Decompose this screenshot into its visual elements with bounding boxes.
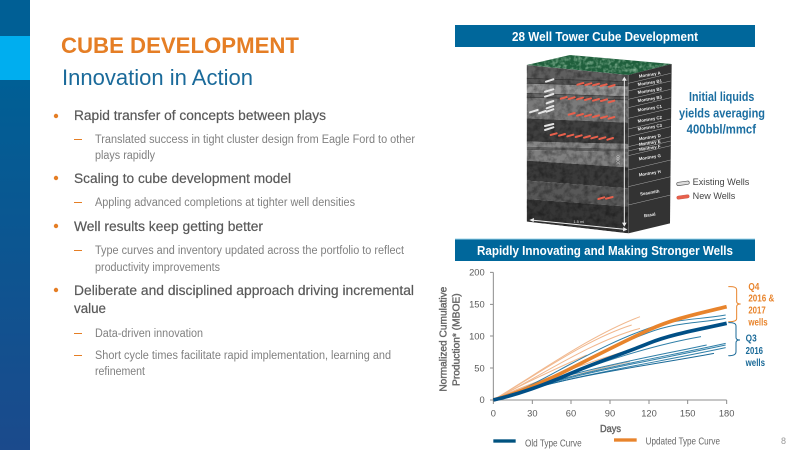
label: Q3 wells: 2016 [746, 346, 763, 357]
label: Q4 wells: wells [748, 318, 768, 329]
new wells [551, 83, 615, 199]
bullet 4 [54, 283, 414, 316]
x axis labels: 150 [680, 408, 695, 418]
cube diagram: Montney C3 [637, 123, 663, 132]
sub-bullet 3: Type curves and inventory updated across the portfolio to reflect [95, 245, 405, 257]
label: Q4 wells: 2016 & [748, 294, 774, 305]
cube diagram: Montney D [638, 133, 661, 141]
page number: 8 [781, 436, 786, 446]
bullet 4: Deliberate and disciplined approach driving incremental [74, 283, 414, 298]
label: Q3 wells [745, 334, 765, 369]
sub-bullet 3: productivity improvements [95, 262, 220, 274]
y axis title [438, 286, 463, 392]
callout: initial liquids: yields averaging [679, 107, 765, 121]
thin blue well curves [493, 315, 726, 400]
cube diagram: Montney B2 [637, 86, 663, 95]
sub-bullet 1: Translated success in tight cluster design from Eagle Ford to other [95, 134, 415, 146]
cube diagram: Montney C2 [637, 115, 663, 124]
x axis labels: 90 [605, 408, 615, 418]
dimension arrows [529, 77, 627, 231]
cube diagram: Montney A [639, 70, 662, 79]
sub-bullet 5 [74, 350, 391, 378]
header bar: cube [455, 25, 755, 47]
cube panel [527, 55, 765, 233]
y axis title: Normalized Cumulative [438, 286, 449, 392]
y axis labels: 0 [479, 395, 485, 405]
callout: initial liquids: 400bbl/mmcf [687, 122, 757, 136]
bullet 2: Scaling to cube development model [74, 171, 291, 186]
chart panel [438, 267, 774, 449]
cube diagram: Seaumith [640, 188, 660, 197]
legend: existing wells: Existing Wells [693, 177, 750, 187]
legend: updated type curve: Updated Type Curve [646, 437, 720, 448]
y axis labels: 150 [469, 300, 485, 310]
cube diagram [527, 55, 672, 233]
label: Q3 wells: wells [745, 358, 765, 369]
sub-bullet 1 [74, 134, 415, 162]
cube diagram: Basal [644, 211, 656, 218]
sub-bullet 2: Appling advanced completions at tighter well densities [95, 197, 355, 209]
bullet 4: value [74, 301, 106, 316]
cube diagram: Montney G [638, 153, 662, 161]
y axis labels [469, 267, 485, 405]
sub-bullet 1: plays rapidly [95, 150, 155, 162]
header bar: wells: Rapidly Innovating and Making Stronger Wells [477, 244, 733, 258]
cube diagram: Montney C1 [637, 104, 663, 113]
existing wells [530, 79, 553, 130]
bullet list [54, 108, 415, 378]
header bar: wells [455, 238, 755, 261]
label: Q3 wells: Q3 [746, 334, 757, 345]
callout: initial liquids [679, 90, 765, 136]
x axis labels: 120 [641, 408, 657, 418]
cube diagram: 1000 [616, 155, 621, 165]
cube diagram: Montney H [638, 169, 661, 177]
bullet 3: Well results keep getting better [74, 219, 264, 234]
bullet 1: Rapid transfer of concepts between plays [74, 108, 326, 123]
y axis labels: 200 [469, 267, 485, 277]
legend: updated type curve [614, 437, 720, 448]
x axis labels [491, 408, 734, 418]
title: CUBE DEVELOPMENT [61, 33, 300, 58]
header bar: cube: 28 Well Tower Cube Development [512, 30, 699, 44]
x axis labels: 30 [527, 408, 538, 418]
sub-bullet 5: Short cycle times facilitate rapid implementation, learning and [95, 350, 391, 362]
cube diagram: Montney B1 [637, 78, 663, 87]
sub-bullet 5: refinement [95, 366, 146, 378]
cube diagram: Montney B3 [637, 94, 663, 103]
updated type curve [493, 307, 727, 400]
old type curve [493, 323, 727, 400]
orange bracket [728, 287, 741, 322]
sub-bullet 3 [74, 245, 405, 274]
subtitle: Innovation in Action [62, 65, 253, 90]
legend: new wells: New Wells [693, 191, 736, 201]
sub-bullet 4: Data-driven innovation [95, 328, 203, 340]
y axis title: Production* (MBOE) [452, 293, 463, 386]
sidebar [0, 0, 30, 450]
cube diagram: Montney F [639, 144, 661, 152]
thin orange well curves [493, 317, 640, 400]
callout: initial liquids: Initial liquids [689, 90, 754, 104]
label: Q4 wells: 2017 [748, 305, 766, 316]
cube diagram: 1.5 mi [573, 219, 584, 224]
legend: old type curve [493, 438, 582, 449]
cube diagram: Montney E [639, 139, 661, 147]
x axis labels: 0 [491, 408, 496, 418]
blue bracket [728, 323, 740, 356]
x axis title: Days [600, 424, 621, 435]
label: Q4 wells: Q4 [748, 282, 760, 293]
x axis labels: 60 [566, 408, 576, 418]
label: Q4 wells [748, 282, 774, 329]
y axis labels: 100 [469, 331, 485, 341]
y axis labels: 50 [474, 363, 485, 373]
axis lines [490, 272, 727, 404]
legend: old type curve: Old Type Curve [525, 438, 582, 449]
x axis labels: 180 [719, 408, 734, 418]
